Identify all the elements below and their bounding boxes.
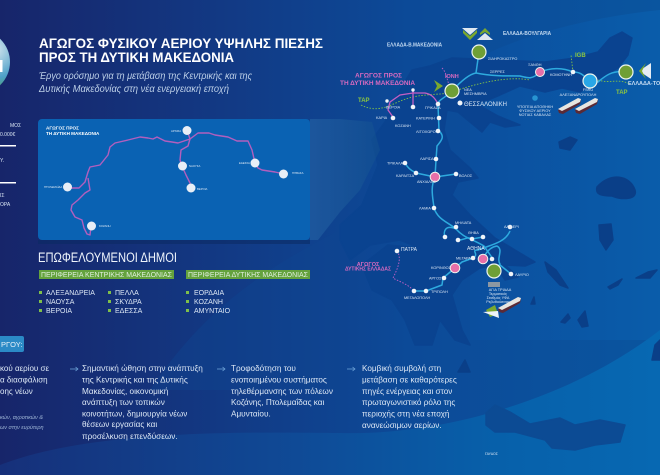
municipalities list: ΑΛΕΞΑΝΔΡΕΙΑ	[46, 290, 95, 297]
map labels: ΚΟΖΑΝΗ	[395, 124, 411, 128]
storage node	[532, 95, 538, 101]
subtitle	[38, 70, 252, 95]
benefit column 4: πρωταγωνιστικό ρόλο της	[362, 398, 455, 407]
route callouts	[340, 72, 459, 272]
benefit column 1: κών, αγροτικών &	[0, 414, 43, 421]
mini map labels: ΑΡΝΙΣΑ	[171, 129, 181, 133]
map labels: ΑΓΙΑ ΤΡΙΑΔΑ	[489, 288, 512, 292]
benefit column 3: Αμυνταίου.	[231, 410, 271, 418]
title: ΠΡΟΣ ΤΗ ΔΥΤΙΚΗ ΜΑΚΕΔΟΝΙΑ	[39, 49, 234, 65]
map labels: ΤΡΙΚΑΛΑ	[387, 162, 404, 166]
panel: route mini map	[38, 119, 310, 244]
municipalities list: ΣΚΥΔΡΑ	[115, 299, 142, 306]
municipalities list: ΕΔΕΣΣΑ	[115, 308, 143, 315]
map labels: ΒΟΛΟΣ	[459, 174, 473, 178]
benefit column 2: Μακεδονίας, οικονομική	[82, 387, 169, 396]
mini map heading	[46, 126, 100, 136]
mini map heading: ΑΓΩΓΟΣ ΠΡΟΣ	[46, 126, 79, 130]
municipalities list: ΠΕΛΛΑ	[115, 290, 139, 297]
map labels: ΚΟΜΟΤΗΝΗ	[550, 73, 572, 77]
map labels: ΚΑΤΕΡΙΝΗ	[416, 116, 435, 120]
arrow	[70, 367, 78, 371]
arrow	[347, 367, 355, 371]
pipeline tags: TAP	[358, 98, 370, 104]
map labels: Ρεβυθούσσας	[486, 300, 510, 304]
map labels: ΑΛΙΒΕΡΙ	[504, 225, 519, 229]
arrow	[217, 367, 225, 371]
route callouts: ΔΥΤΙΚΗΣ ΕΛΛΑΔΑΣ	[345, 266, 392, 272]
map labels: ΓΑΥΔΟΣ	[485, 452, 499, 456]
benefit column 4: Κομβική συμβολή στη	[362, 364, 442, 373]
map labels: ΞΑΝΘΗ	[528, 63, 542, 67]
benefit column 3: Κοζάνης, Πτολεμαΐδας και	[231, 397, 325, 407]
municipalities list: ΒΕΡΟΙΑ	[46, 308, 72, 315]
pipeline tags: IGB	[575, 53, 586, 59]
route callouts: ΤΗ ΔΥΤΙΚΗ ΜΑΚΕΔΟΝΙΑ	[340, 80, 415, 87]
map labels: ΘΗΒΑ	[468, 231, 479, 235]
left key figures: ΜΟΣ	[10, 123, 21, 129]
map labels: ΑΘΗΝΑ	[467, 246, 485, 252]
mini map labels: ΚΟΖΑΝΗ	[99, 224, 111, 228]
benefit column 3	[231, 364, 333, 418]
pink route	[388, 90, 438, 117]
mini map labels: ΓΡΙΒΑΣΑ	[292, 171, 304, 175]
map labels: ΑΡΓΟΣ	[429, 276, 442, 280]
mini map route	[68, 130, 284, 235]
benefit column 2: προσέλκυση επενδύσεων.	[82, 432, 178, 441]
map labels: ΜΕΓΑΛΟΠΟΛΗ	[404, 296, 431, 300]
benefit column 2	[82, 364, 203, 441]
white pipeline nodes	[385, 70, 575, 293]
benefit column 4: ανανεώσιμων αερίων.	[362, 421, 442, 430]
route callouts: ΑΓΩΓΟΣ ΠΡΟΣ	[355, 72, 402, 80]
benefit column 2: κοινοτήτων, δημιουργία νέων	[82, 410, 187, 418]
border arrows	[434, 28, 651, 318]
benefit column 1: ων στην ευρύτερη	[0, 424, 44, 431]
pipeline tags	[358, 53, 628, 104]
left key figures: 0.000€	[0, 132, 16, 138]
label: project benefits: ΡΓΟΥ:	[1, 340, 22, 349]
map labels	[376, 31, 660, 456]
map labels: ΘΕΣΣΑΛΟΝΙΚΗ	[464, 102, 507, 108]
municipalities list: ΕΟΡΔΑΙΑ	[194, 290, 225, 297]
mini map labels: ΕΔΕΣΣΑ	[239, 161, 250, 165]
map labels: FSRU	[583, 88, 593, 92]
map labels: ΑΝΧΙΑΛΟΣ	[417, 180, 437, 184]
pipeline network	[340, 28, 660, 456]
left key figures: ΟΡΑ	[0, 202, 11, 208]
LNG ships	[498, 98, 598, 313]
logo globe	[0, 30, 10, 94]
heading: municipalities: ΕΠΩΦΕΛΟΥΜΕΝΟΙ ΔΗΜΟΙ	[38, 250, 177, 265]
mini map labels: ΒΕΡΟΙΑ	[197, 187, 208, 191]
title	[39, 35, 323, 65]
map labels: ΛΑΥΡΙΟ	[515, 273, 529, 277]
benefit column 2: Σημαντική ώθηση στην ανάπτυξη	[82, 364, 203, 373]
map labels: ΕΛΛΑΔΑ-Β.ΜΑΚΕΔΟΝΙΑ	[387, 42, 442, 48]
map labels: ΦΥΣΙΚΟΥ ΑΕΡΙΟΥ	[519, 109, 551, 113]
mini map nodes	[63, 126, 288, 230]
municipalities list	[39, 290, 231, 315]
LNG terminal marker	[488, 282, 500, 287]
map of Greece	[340, 32, 660, 450]
benefit column 3: ενοποιημένου συστήματος	[231, 376, 327, 384]
benefit column 2: θέσεων εργασίας και	[82, 420, 157, 429]
benefit column 3: Τροφοδότηση του	[231, 364, 296, 373]
benefit column 1: οης νέων	[0, 387, 33, 396]
cyan pipeline	[405, 52, 626, 291]
region label: Western Macedonia: ΠΕΡΙΦΕΡΕΙΑ ΔΥΤΙΚΗΣ ΜΑΚΕΔΟΝΙΑΣ	[188, 272, 309, 279]
benefit column 1	[0, 364, 49, 431]
map labels: ΣΕΡΡΕΣ	[490, 70, 505, 74]
label: project benefits	[0, 336, 24, 352]
route callouts: ΙΟΝΗ	[445, 74, 459, 80]
map labels: ΥΠΟΓΕΙΑ ΑΠΟΘΗΚΗ	[517, 105, 553, 109]
dotted TAP and connector lines	[361, 55, 630, 291]
route callouts: ΑΓΩΓΟΣ	[357, 262, 380, 268]
map labels: ΜΕΓΑΡΑ	[456, 256, 471, 260]
benefit column 1: α διασφάλιση	[0, 376, 48, 384]
left key figures: ΙΣ	[0, 193, 4, 199]
subtitle: Έργο ορόσημο για τη μετάβαση της Κεντρικής και της	[39, 70, 252, 82]
green stations	[445, 45, 633, 278]
pipeline tags: TAP	[616, 90, 628, 96]
pink stations	[430, 68, 544, 273]
subtitle: Δυτικής Μακεδονίας στη νέα ενεργειακή εποχή	[38, 83, 229, 95]
municipalities list: ΚΟΖΑΝΗ	[194, 299, 223, 306]
map labels: ΜΗΛΙΑΤΑ	[455, 221, 472, 225]
mini map labels: ΠΤΟΛΕΜΑΪΔΑ	[44, 185, 62, 189]
map labels: ΛΑΜΙΑ	[419, 206, 431, 210]
municipalities list: ΝΑΟΥΣΑ	[46, 299, 75, 306]
mini map heading: ΤΗ ΔΥΤΙΚΗ ΜΑΚΕΔΟΝΙΑ	[46, 131, 100, 136]
region label: Central Macedonia: ΠΕΡΙΦΕΡΕΙΑ ΚΕΝΤΡΙΚΗΣ ΜΑΚΕΔΟΝΙΑΣ	[41, 272, 173, 279]
blue station	[583, 74, 597, 88]
map labels: ΜΕΣΗΜΒΡΙΑ	[464, 92, 487, 96]
benefit column 1: κού αερίου σε	[0, 364, 49, 373]
benefit column 3: τηλεθέρμανσης των πόλεων	[231, 387, 333, 396]
mini map labels: ΝΑΟΥΣΑ	[189, 164, 201, 168]
map labels: ΚΟΡΙΝΘΟΣ	[431, 266, 452, 270]
benefit column 4: πηγές ενέργειας και στον	[362, 387, 452, 396]
benefit column 4	[362, 364, 457, 430]
mini map labels	[44, 129, 304, 228]
benefit column 2: της Κεντρικής και της Δυτικής	[82, 376, 188, 384]
map labels: ΚΑΡΙΑ	[376, 116, 388, 120]
map labels: ΛΙΤΟΧΩΡΟ	[416, 130, 436, 134]
map labels: Σταθμός ΥΦΑ	[487, 296, 510, 300]
map labels: ΣΙΔΗΡΟΚΑΣΤΡΟ	[488, 57, 517, 61]
map labels: ΚΑΡΔΙΤΣΑ	[396, 174, 415, 178]
left key figures: Υ.	[0, 158, 4, 164]
map labels: Τερματικός	[489, 292, 507, 296]
title: ΑΓΩΓΟΣ ΦΥΣΙΚΟΥ ΑΕΡΙΟΥ ΥΨΗΛΗΣ ΠΙΕΣΗΣ	[39, 35, 323, 51]
benefit column 4: μετάβαση σε καθαρότερες	[362, 376, 457, 384]
map labels: ΒΕΡΟΙΑ	[386, 106, 401, 110]
map labels: ΠΑΤΡΑ	[401, 247, 418, 253]
map labels: ΝΟΤΙΑΣ ΚΑΒΑΛΑΣ	[519, 113, 552, 117]
map labels: ΑΛΕΞΑΝΔΡΟΥΠΟΛΗ	[560, 93, 597, 97]
benefit column 4: περιοχής στη νέα εποχή	[362, 410, 450, 418]
left key figures	[0, 123, 21, 208]
faded map panel edge	[310, 119, 380, 240]
map labels: ΝΕΑ	[464, 88, 472, 92]
map labels: ΓΡΙΚΑΣΑ	[425, 106, 441, 110]
map labels: ΤΡΙΠΟΛΗ	[431, 290, 448, 294]
map labels: ΕΛΛΑΔΑ-ΒΟΥΛΓΑΡΙΑ	[503, 31, 551, 37]
benefit column 2: ανάπτυξη των τοπικών	[82, 398, 165, 407]
municipalities list: ΑΜΥΝΤΑΙΟ	[194, 308, 231, 315]
map labels: ΛΑΡΙΣΑ	[420, 157, 434, 161]
